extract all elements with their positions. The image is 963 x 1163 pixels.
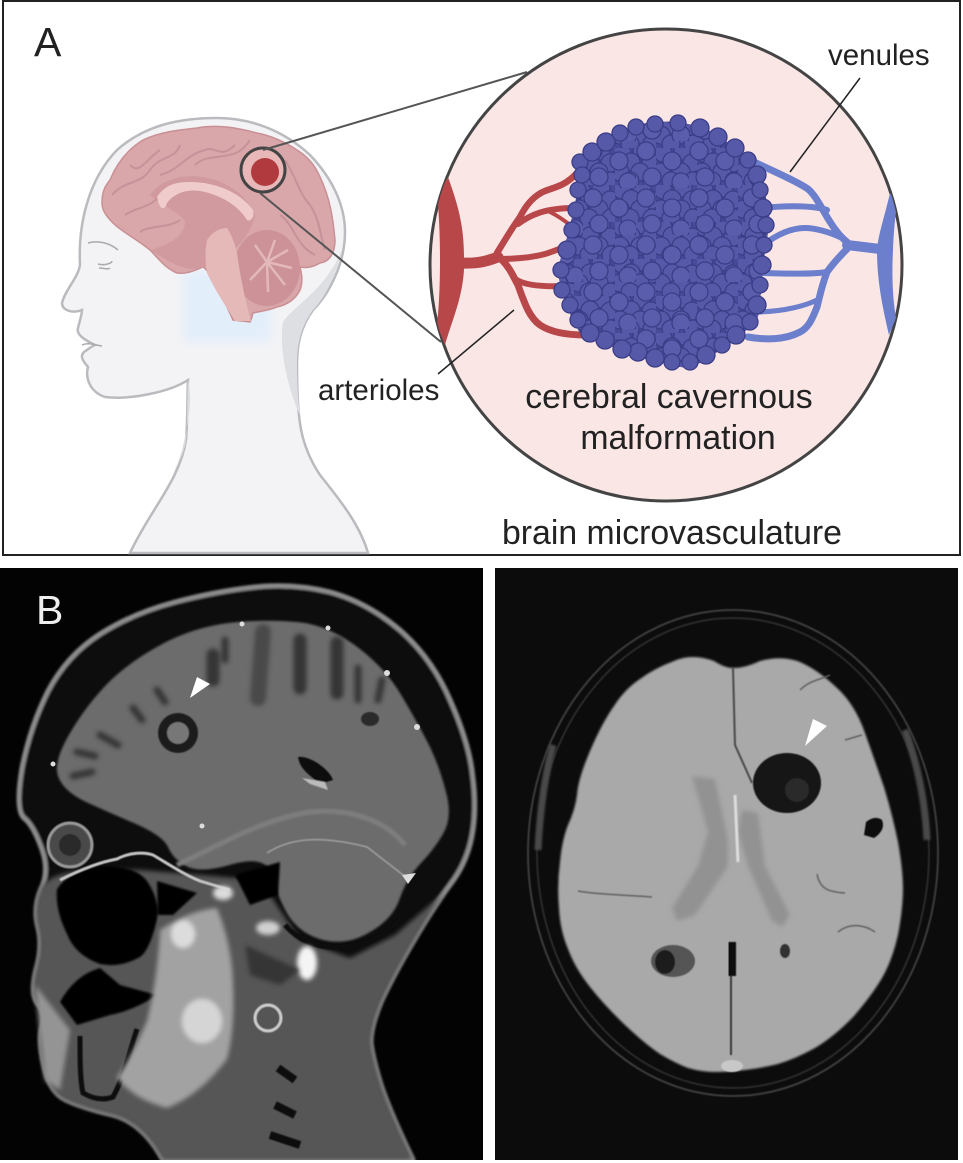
head silhouette <box>62 118 368 553</box>
neck shading <box>282 250 342 415</box>
cerebellum <box>234 230 300 306</box>
eye orbit <box>48 823 92 867</box>
label: cerebral cavernous malformation: cerebral cavernous <box>525 378 813 416</box>
zoom circle <box>430 29 902 501</box>
zoom circle: malformation <box>580 419 776 457</box>
arrowhead <box>805 719 827 746</box>
brain stem <box>206 228 251 321</box>
lesions <box>158 712 379 790</box>
sulci <box>578 675 875 932</box>
sinuses and airway <box>57 862 280 1025</box>
cerebellar arbor <box>250 240 292 292</box>
label: arterioles <box>318 310 514 407</box>
diploe highlights <box>538 730 927 850</box>
zoom lines <box>260 72 527 342</box>
bright dural dots <box>50 622 420 884</box>
thalamus and midbrain <box>150 176 255 269</box>
lesion with ring <box>241 148 285 192</box>
jaw shading <box>165 380 190 490</box>
falx base <box>721 1060 743 1072</box>
mouth outline <box>80 1029 137 1099</box>
arterioles <box>437 173 585 345</box>
brain folds <box>112 140 325 255</box>
cavernous mass <box>553 115 774 370</box>
tentorium and corpus <box>177 811 405 865</box>
skull base region <box>245 945 300 985</box>
midline <box>731 668 752 1055</box>
ventricles <box>672 776 790 927</box>
arrowhead <box>190 677 210 698</box>
panel B left: sagittal MRI <box>0 568 483 1160</box>
lower head tissue <box>33 870 445 1160</box>
skull base dark line <box>283 923 383 950</box>
eye and eyebrow <box>82 242 118 346</box>
large lesion <box>753 753 821 813</box>
brain <box>102 126 335 322</box>
skull rings <box>528 610 938 1096</box>
venules <box>748 160 897 339</box>
gyri and sulci <box>73 632 382 776</box>
panel A: illustration <box>3 1 960 555</box>
label: arterioles: arterioles <box>318 374 439 407</box>
small lesions <box>651 818 883 977</box>
skull and scalp <box>19 586 475 1160</box>
panel label B: B <box>36 587 63 633</box>
neck highlight <box>183 270 271 342</box>
panel label A: A <box>34 19 62 65</box>
cerebrum <box>57 621 449 942</box>
label: brain microvasculature: brain microvasculature <box>502 514 842 552</box>
label: venules <box>790 39 930 172</box>
label: venules: venules <box>828 39 930 72</box>
corpus callosum <box>157 182 253 221</box>
sinus bright rim <box>60 853 230 890</box>
cerebrum <box>558 657 903 1072</box>
cervical spine <box>255 1005 300 1145</box>
bright face tissue <box>35 886 317 1108</box>
panel B right: axial MRI <box>495 568 958 1160</box>
